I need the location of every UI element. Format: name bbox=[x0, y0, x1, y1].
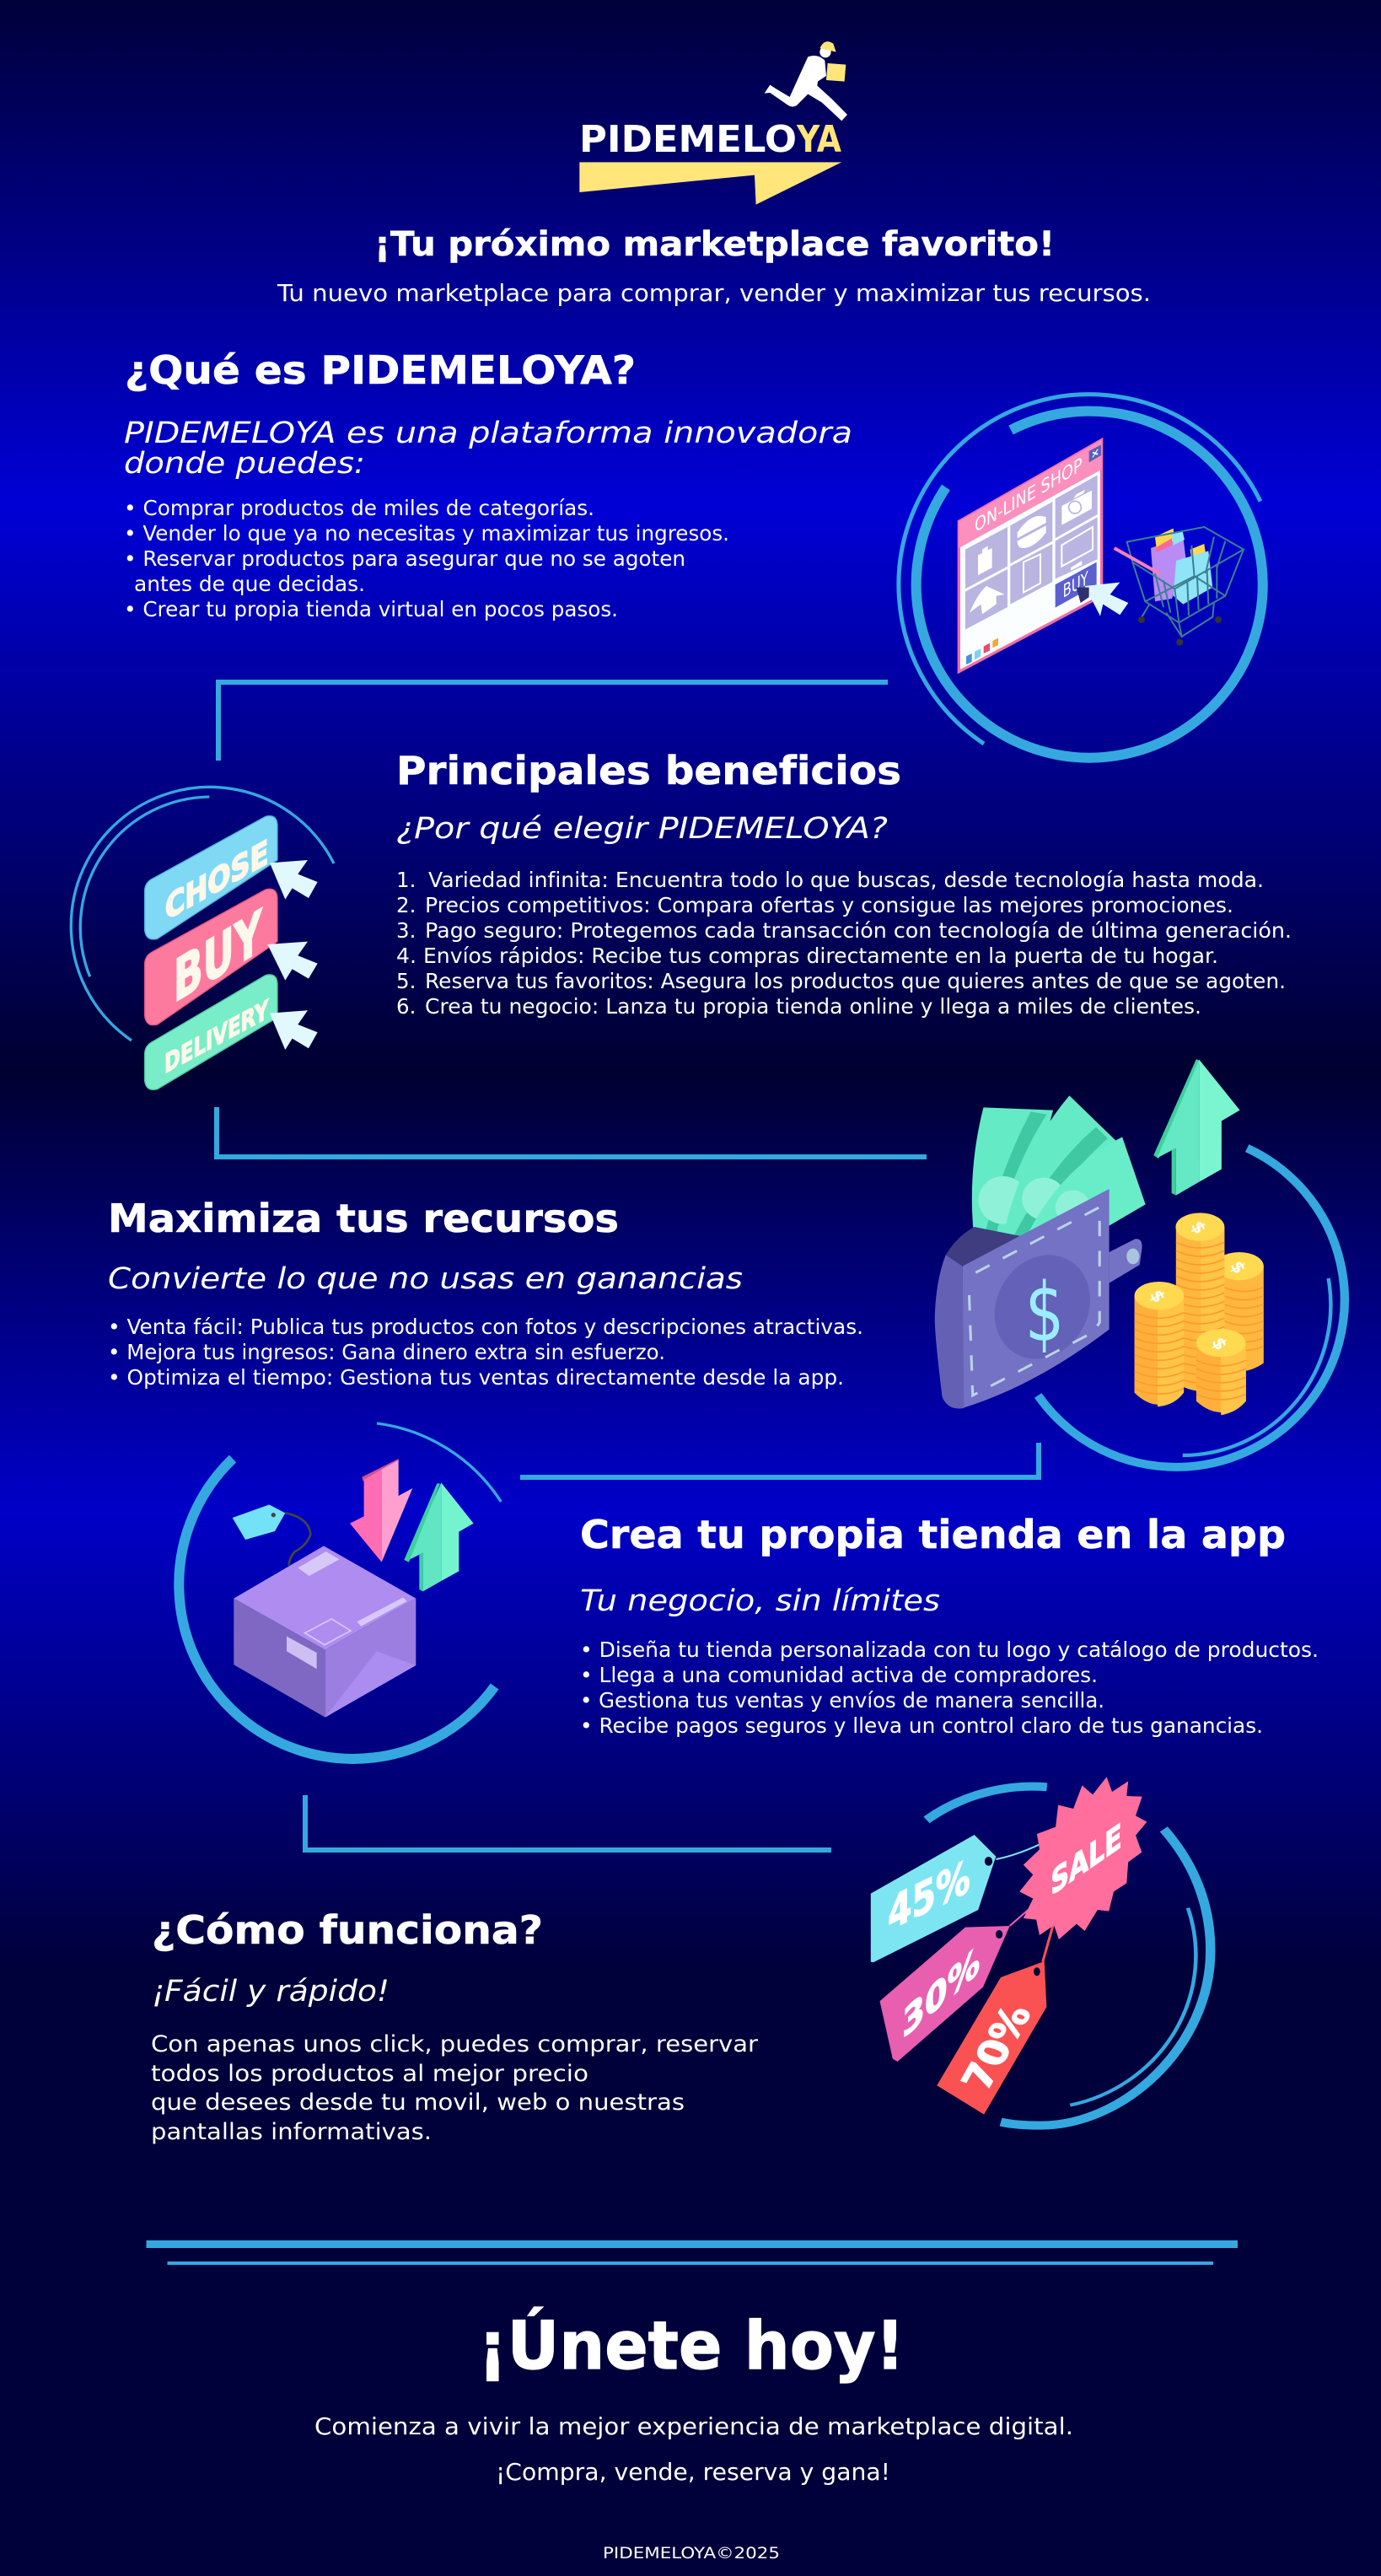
numbered list: Precios competitivos: Compara ofertas y consigue las mejores promociones. bbox=[425, 893, 1233, 917]
subtitle: Tu nuevo marketplace para comprar, vender y maximizar tus recursos. bbox=[277, 280, 1151, 307]
connector line 1 bbox=[218, 682, 888, 761]
bullet list: antes de que decidas. bbox=[134, 572, 365, 596]
illustration: online shop bbox=[899, 395, 1263, 758]
icon: coin stacks: $ bbox=[1187, 1218, 1211, 1238]
heading: beneficios: Principales beneficios bbox=[396, 748, 901, 793]
numbered list: Pago seguro: Protegemos cada transacción con tecnología de última generación. bbox=[425, 918, 1292, 943]
button: buy: BUY bbox=[174, 896, 262, 1017]
bullet list: • Crear tu propia tienda virtual en pocos pasos. bbox=[124, 597, 618, 621]
logo: PIDEMELOYA: YA bbox=[796, 118, 841, 161]
numbered list: 1. bbox=[396, 868, 416, 892]
icon: wallet: $ bbox=[1025, 1266, 1064, 1361]
closing text: ¡Compra, vende, reserva y gana! bbox=[496, 2459, 890, 2486]
button: chose: CHOSE bbox=[165, 832, 268, 928]
bullet list: • Venta fácil: Publica tus productos con fotos y descripciones atractivas. bbox=[108, 1315, 863, 1339]
bullet list: • Reservar productos para asegurar que no se agoten bbox=[124, 546, 685, 571]
icon: coin stacks: $ bbox=[1146, 1286, 1169, 1306]
subheading: Tu negocio, sin límites bbox=[580, 1584, 940, 1618]
button: chose bbox=[145, 816, 277, 939]
paragraph bbox=[151, 2031, 759, 2145]
tag: 70% bbox=[937, 1961, 1046, 2115]
shop window: × bbox=[1091, 445, 1099, 462]
panel: maximiza bbox=[108, 1196, 863, 1390]
panel: crea tu tienda bbox=[580, 1512, 1319, 1738]
paragraph: pantallas informativas. bbox=[151, 2119, 432, 2145]
button: buy bbox=[145, 889, 277, 1025]
cursors bbox=[267, 860, 318, 1050]
title: ¡Tu próximo marketplace favorito! bbox=[374, 225, 1055, 264]
bullet list bbox=[580, 1638, 1319, 1738]
shop window: ON-LINE SHOP bbox=[975, 454, 1083, 538]
numbered list: 3. bbox=[396, 918, 416, 943]
numbered list: 5. bbox=[396, 969, 416, 993]
closing text bbox=[314, 2413, 1073, 2486]
badge: sale bbox=[1019, 1777, 1147, 1939]
logo arrow bbox=[579, 162, 841, 205]
bullet list: • Mejora tus ingresos: Gana dinero extra sin esfuerzo. bbox=[108, 1340, 665, 1364]
connector line 4 bbox=[305, 1795, 831, 1850]
subheading: PIDEMELOYA es una plataforma innovadora bbox=[124, 417, 852, 450]
icon: bills bbox=[972, 1095, 1146, 1250]
bullet list: • Diseña tu tienda personalizada con tu logo y catálogo de productos. bbox=[580, 1638, 1319, 1662]
numbered list: 2. bbox=[396, 893, 416, 917]
paragraph: que desees desde tu movil, web o nuestras bbox=[151, 2089, 685, 2116]
bullet list bbox=[124, 496, 729, 621]
heading: como funciona: ¿Cómo funciona? bbox=[152, 1907, 543, 1953]
tag: 45% bbox=[871, 1835, 996, 1962]
icon: delivery runner bbox=[765, 41, 847, 121]
shopping cart bbox=[1115, 527, 1244, 646]
tag: 30%: 30% bbox=[902, 1936, 980, 2048]
connector line 3 bbox=[520, 1443, 1039, 1477]
paragraph: todos los productos al mejor precio bbox=[151, 2061, 588, 2087]
illustration: sale tags bbox=[871, 1777, 1211, 2126]
tag: 45%: 45% bbox=[888, 1850, 970, 1942]
badge: sale: SALE bbox=[1051, 1815, 1122, 1904]
subheading: ¿Por qué elegir PIDEMELOYA? bbox=[396, 812, 888, 846]
heading: maximiza: Maximiza tus recursos bbox=[108, 1196, 619, 1241]
icon: coin stacks: $ bbox=[1207, 1334, 1232, 1353]
illustration: wallet and coins bbox=[935, 1059, 1345, 1467]
bullet list bbox=[108, 1315, 863, 1390]
button: delivery: DELIVERY bbox=[164, 993, 269, 1080]
button: delivery bbox=[145, 975, 277, 1089]
footer: PIDEMELOYA©2025 bbox=[603, 2544, 780, 2563]
icon: coin stacks: $ bbox=[1226, 1257, 1250, 1277]
icon: wallet bbox=[935, 1189, 1142, 1409]
heading: que es: ¿Qué es PIDEMELOYA? bbox=[125, 347, 636, 393]
bullet list: • Vender lo que ya no necesitas y maximizar tus ingresos. bbox=[124, 521, 729, 546]
subheading bbox=[124, 417, 852, 481]
panel: como funciona bbox=[151, 1907, 759, 2145]
subheading: donde puedes: bbox=[124, 447, 365, 481]
icon: down arrow bbox=[350, 1459, 412, 1562]
cursor bbox=[1085, 583, 1128, 616]
closing text: Comienza a vivir la mejor experiencia de marketplace digital. bbox=[314, 2413, 1073, 2440]
shop window: BUY bbox=[1063, 567, 1088, 603]
bullet list: • Optimiza el tiempo: Gestiona tus ventas directamente desde la app. bbox=[108, 1365, 844, 1390]
illustration: box and arrows bbox=[179, 1423, 501, 1759]
tag: 70%: 70% bbox=[954, 1999, 1040, 2096]
illustration: chose buy delivery bbox=[71, 787, 334, 1089]
icon: box bbox=[234, 1546, 416, 1718]
logo: PIDEMELOYA bbox=[579, 41, 847, 205]
numbered list: 6. bbox=[396, 994, 416, 1019]
subheading: Convierte lo que no usas en ganancias bbox=[108, 1262, 743, 1296]
icon: up arrow bbox=[404, 1482, 474, 1591]
numbered list: Variedad infinita: Encuentra todo lo que buscas, desde tecnología hasta moda. bbox=[428, 868, 1264, 892]
numbered list: Crea tu negocio: Lanza tu propia tienda online y llega a miles de clientes. bbox=[425, 994, 1201, 1019]
paragraph: Con apenas unos click, puedes comprar, reservar bbox=[151, 2031, 759, 2057]
heading: crea tienda: Crea tu propia tienda en la app bbox=[580, 1512, 1286, 1557]
bullet list: • Llega a una comunidad activa de compradores. bbox=[580, 1663, 1098, 1687]
numbered list bbox=[396, 868, 1292, 1019]
closing heading: ¡Únete hoy! bbox=[478, 2307, 905, 2385]
bullet list: • Recibe pagos seguros y lleva un control claro de tus ganancias. bbox=[580, 1713, 1263, 1738]
panel: que es bbox=[124, 347, 852, 621]
bullet list: • Gestiona tus ventas y envíos de manera sencilla. bbox=[580, 1688, 1104, 1713]
icon: coin stacks bbox=[1135, 1213, 1264, 1415]
connector line 2 bbox=[217, 1107, 927, 1157]
divider lines bbox=[147, 2240, 1238, 2265]
subheading: ¡Fácil y rápido! bbox=[152, 1975, 390, 2009]
numbered list: Reserva tus favoritos: Asegura los productos que quieres antes de que se agoten. bbox=[425, 969, 1286, 993]
icon: price tag bbox=[233, 1504, 310, 1566]
numbered list: 4. Envíos rápidos: Recibe tus compras directamente en la puerta de tu hogar. bbox=[396, 944, 1218, 968]
logo: PIDEMELOYA: PIDEMELO bbox=[579, 118, 797, 161]
panel: beneficios bbox=[396, 748, 1292, 1019]
bullet list: • Comprar productos de miles de categorías. bbox=[124, 496, 594, 520]
tag: 30% bbox=[880, 1926, 1010, 2062]
icon: up arrow bbox=[1153, 1059, 1240, 1196]
shop window bbox=[959, 440, 1102, 672]
